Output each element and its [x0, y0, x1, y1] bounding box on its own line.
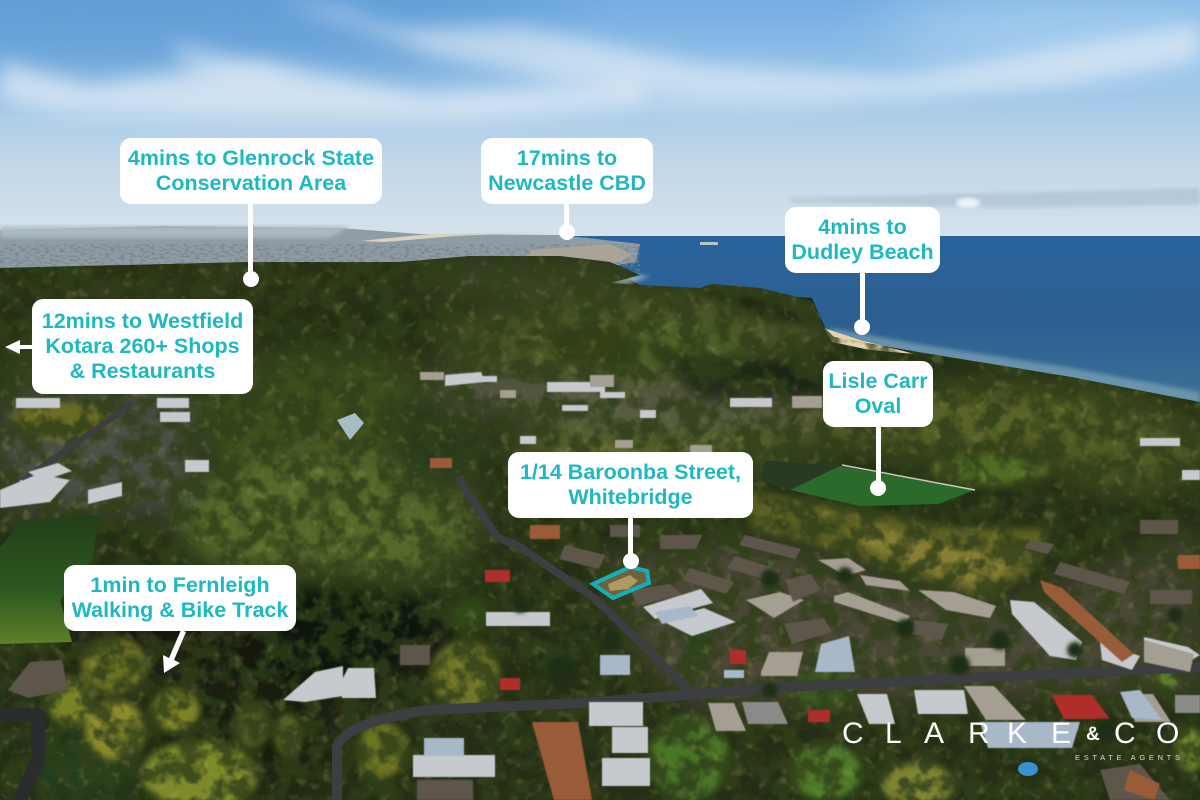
callout: Fernleigh track — [64, 565, 296, 631]
logo: Clarke & Co: L — [885, 717, 902, 750]
callout: Dudley Beach — [785, 207, 940, 273]
logo: Clarke & Co: C — [1114, 717, 1136, 750]
sunlit tree band — [748, 490, 1050, 600]
forest base — [0, 250, 1200, 800]
house rows — [0, 372, 1200, 800]
callout: Fernleigh track: 1min to Fernleigh Walking & Bike Track — [72, 573, 288, 622]
sports oval — [760, 460, 975, 506]
pointer: Dudley Beach — [854, 270, 870, 335]
callout: Glenrock — [120, 138, 382, 204]
callout: property address: 1/14 Baroonba Street, Whitebridge — [520, 460, 741, 509]
pointer: Lisle Carr Oval — [870, 425, 886, 496]
callout: Lisle Carr Oval — [823, 361, 933, 427]
sand — [824, 328, 915, 354]
foliage texture — [0, 250, 1200, 800]
logo: Clarke & Co — [842, 717, 1184, 762]
pointer: Glenrock — [243, 200, 259, 287]
bright tree clumps — [10, 402, 1200, 800]
ocean — [340, 236, 1200, 410]
clouds — [0, 3, 1200, 118]
sky — [0, 0, 1200, 245]
distant cloud bank — [790, 188, 1200, 208]
callout: Lisle Carr Oval: Lisle Carr Oval — [828, 369, 928, 418]
logo: Clarke & Co: E — [1051, 717, 1071, 750]
callout: Newcastle CBD: 17mins to Newcastle CBD — [488, 146, 646, 195]
logo: Clarke & Co: A — [924, 717, 944, 750]
logo: Clarke & Co: ESTATE AGENTS — [1075, 753, 1184, 762]
arrow: west to Westfield — [5, 340, 33, 354]
logo: Clarke & Co: R — [968, 717, 990, 750]
callout: Glenrock: 4mins to Glenrock State Conservation Area — [128, 146, 374, 195]
logo: Clarke & Co: O — [1156, 717, 1179, 750]
left field — [0, 515, 100, 644]
roads — [0, 405, 1200, 800]
pointer: Newcastle CBD — [559, 200, 575, 240]
arrow: to Fernleigh track — [163, 630, 186, 673]
callout: property address — [508, 452, 753, 518]
property outline — [593, 567, 649, 598]
logo: Clarke & Co: & — [1086, 724, 1100, 745]
callout: Dudley Beach: 4mins to Dudley Beach — [791, 215, 934, 264]
logo: Clarke & Co: K — [1007, 717, 1027, 750]
street trees — [512, 567, 1183, 740]
logo: Clarke & Co: C — [842, 717, 864, 750]
callout: Westfield Kotara: 12mins to Westfield Kotara 260+ Shops & Restaurants — [42, 309, 243, 383]
callout: Newcastle CBD — [481, 138, 653, 204]
distant city and coastline — [0, 226, 640, 272]
pointer: property — [623, 515, 639, 569]
creek and pool — [337, 413, 1038, 776]
